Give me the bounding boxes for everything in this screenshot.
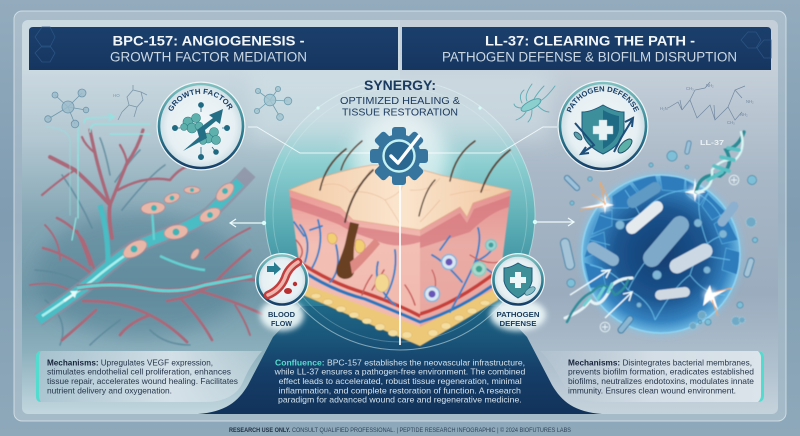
vessel band right: [420, 270, 499, 314]
molecule: peptide structure: [660, 82, 754, 125]
bacteria shapes: [573, 131, 634, 155]
loose rods outside: [565, 143, 751, 330]
cell nuclei: [130, 188, 228, 252]
accent bar: [36, 351, 41, 402]
spark top: [684, 178, 706, 202]
shield shade: [603, 110, 619, 149]
rod: [722, 206, 734, 222]
badge ring: [558, 80, 648, 172]
label: blood flow: [268, 310, 296, 328]
light beam: [399, 165, 401, 345]
hair follicle: [336, 222, 359, 279]
line: DEFENSE: [500, 319, 536, 328]
subtitle line two: TISSUE RESTORATION: [342, 108, 458, 118]
sparks: [580, 178, 732, 316]
line: FLOW: [271, 319, 293, 328]
callout: confluence text: [274, 358, 526, 405]
badge ring: [494, 256, 542, 304]
line: Confluence: BPC-157 establishes the neovascular infrastructure,: [275, 358, 525, 367]
check mark: [391, 136, 419, 163]
badge curved label: GROWTH FACTOR: [168, 88, 232, 111]
shield: [504, 263, 532, 298]
rod: [660, 292, 685, 295]
molecule: top left: [45, 89, 89, 128]
central healing halo: [265, 132, 535, 307]
green cell: [472, 262, 486, 276]
rod: [632, 207, 657, 228]
vessel: [268, 262, 298, 295]
hexagon decoration: [741, 32, 771, 58]
label glow right: [490, 299, 546, 331]
title line one: LL-37: CLEARING THE PATH -: [485, 32, 695, 48]
label glow left: [260, 299, 304, 331]
dark tissue shade: [35, 213, 245, 337]
methyl label two: CH₃: [727, 120, 735, 125]
purple cell: [442, 254, 456, 270]
red capillary network: [30, 130, 262, 342]
fat layer: [302, 280, 499, 346]
fat cluster: [375, 274, 389, 292]
line: inflammation, and complete restoration of function. A research: [279, 386, 521, 395]
bacterium: [523, 285, 537, 297]
halo arcs: [265, 80, 535, 350]
skin top surface: [289, 165, 511, 230]
right arrow: [535, 218, 574, 226]
icon: synergy gear: [370, 127, 428, 185]
protein cluster: [180, 114, 220, 144]
central glow: [352, 112, 448, 208]
icon: small pathogen defense badge: [491, 253, 545, 307]
cell nuclei: [428, 243, 493, 298]
line: prevents biofilm formation, eradicates established: [568, 368, 754, 377]
line: immunity. Ensures clean wound environment.: [568, 386, 736, 395]
label: LL-37: LL-37: [700, 138, 724, 147]
badge disc: [491, 253, 545, 307]
panel: right background: [400, 20, 778, 414]
icon: growth factor badge: [156, 82, 246, 170]
spark left: [580, 194, 614, 214]
epidermis wave: [290, 196, 510, 248]
DNA helix: bottom: [565, 278, 632, 322]
erector muscle: [350, 238, 380, 274]
amine label two: NH₂: [706, 83, 714, 88]
blood cells: [284, 282, 297, 294]
inner arc: [272, 126, 528, 342]
peptide labels: [660, 83, 754, 125]
panel: right header: [402, 27, 771, 70]
line: while LL-37 ensures a pathogen-free environment. The combined: [274, 368, 526, 377]
synergy heading: [340, 78, 460, 118]
right connector: [428, 127, 557, 153]
small spheres: [616, 219, 727, 308]
icon: pathogen defense badge: [558, 80, 648, 172]
line: nutrient delivery and oxygenation.: [47, 386, 172, 395]
title line two: PATHOGEN DEFENSE & BIOFILM DISRUPTION: [442, 48, 737, 64]
dermis left face: [289, 190, 420, 327]
faint background capillaries: [35, 138, 190, 345]
bacterium small: [573, 131, 583, 141]
left arrow: [230, 219, 263, 227]
icon: blood flow badge: [255, 253, 309, 307]
line: Mechanisms: Disintegrates bacterial membranes,: [568, 358, 752, 367]
sparkle nodes: [262, 106, 537, 225]
attack arrows: [570, 270, 632, 318]
accent bar: [758, 351, 764, 402]
vessel flow arrow: [63, 291, 77, 302]
title line two: GROWTH FACTOR MEDIATION: [110, 48, 307, 64]
immune cells: [424, 240, 496, 302]
line: tissue repair, accelerates wound healing. Facilitates: [47, 377, 238, 386]
fat layer lobules: [311, 293, 490, 338]
rod: [677, 251, 705, 266]
amine label three: NH₂: [746, 99, 754, 104]
sebaceous gland: [328, 233, 365, 253]
gear inner ring: [384, 140, 414, 172]
endothelial cells: [120, 180, 237, 262]
callout text: [47, 358, 238, 395]
teal signal pathways with arrows: [46, 114, 150, 240]
outer arc: [265, 80, 535, 350]
bacterium: [616, 137, 634, 155]
molecule: chemical ring: [113, 85, 147, 120]
subtitle line one: OPTIMIZED HEALING &: [340, 96, 460, 107]
vessel band left: [296, 260, 420, 316]
methyl label: CH₃: [686, 86, 694, 91]
DNA helix: top: [696, 132, 744, 192]
spiky pathogens: [690, 217, 756, 330]
debris dots: [567, 151, 758, 325]
panel: left background: [22, 20, 400, 414]
connector lines to synergy gear: [248, 127, 557, 153]
badge colored ring: [159, 84, 243, 168]
line: paradigm for advanced wound care and regenerative medicine.: [278, 396, 522, 405]
rod: [652, 225, 680, 258]
badge ring: [156, 82, 246, 170]
lower purple cell: [424, 286, 440, 302]
label: pathogen defense: [496, 310, 540, 328]
spark orange lower: [712, 288, 732, 316]
surface cracks: [320, 170, 490, 224]
plus markers: [600, 175, 739, 332]
line: biofilms, neutralizes endotoxins, modulates innate: [568, 377, 754, 386]
badge colored ring: [560, 83, 646, 169]
dermis right face: [420, 190, 511, 327]
header bar: [29, 27, 398, 70]
line: BLOOD: [268, 310, 296, 319]
cell glow: [579, 172, 743, 336]
line: Mechanisms: Upregulates VEGF expression,: [47, 358, 213, 367]
biofilm cracks: [590, 190, 730, 320]
molecule: bacterium top right: [514, 84, 555, 122]
spark left glow: [599, 199, 611, 211]
cross: [510, 272, 526, 288]
callout: left mechanisms: [36, 351, 262, 402]
shield: [582, 105, 624, 154]
sphere rim: [582, 175, 740, 333]
title line one: BPC-157: ANGIOGENESIS -: [112, 32, 305, 48]
hydroxyl label: HO: [113, 93, 120, 98]
title: SYNERGY:: [364, 78, 436, 93]
blood vessels: [294, 220, 500, 322]
panel: left header: [29, 27, 398, 70]
horizontal flow arrows: [230, 218, 574, 227]
spark lower right: [703, 285, 728, 310]
badge curved label: PATHOGEN DEFENSE: [566, 86, 640, 112]
gear body with teeth: [370, 127, 428, 185]
biofilm rim plates: [584, 174, 740, 288]
skin tissue block: [289, 141, 511, 346]
teal main vessel: [38, 172, 252, 320]
teal cell: [486, 240, 496, 250]
line: stimulates endothelial cell proliferation, enhances: [47, 368, 231, 377]
left connector: [248, 127, 376, 153]
callout box: [540, 351, 764, 402]
rod: [633, 188, 655, 202]
panel: dark confluence background: [198, 306, 602, 414]
centre top light backdrop: [250, 70, 550, 140]
header bar: [402, 27, 771, 70]
callout text: [568, 358, 754, 395]
growth arrow: [183, 109, 223, 151]
callout: right mechanisms: [540, 351, 764, 402]
amine label four: NH₂: [740, 112, 748, 117]
vessel core: [268, 262, 298, 295]
flow arrow: [267, 262, 281, 275]
molecule: top centre left: [254, 86, 292, 120]
spark lower right glow: [704, 289, 716, 301]
callout box: [36, 351, 262, 402]
medical cross: [593, 120, 613, 140]
panel: left illustration angiogenesis: [30, 114, 262, 345]
line: effect leads to accelerated, robust tissue regeneration, minimal: [279, 377, 522, 386]
biofilm sphere: [582, 175, 740, 333]
badge disc: [255, 253, 309, 307]
footer disclaimer: RESEARCH USE ONLY. CONSULT QUALIFIED PROFESSIONAL. | PEPTIDE RESEARCH INFOGRAPHIC | © 2024 BIOFUTURES LABS: [229, 426, 571, 434]
deflection arrows: [575, 118, 633, 154]
panel: right illustration biofilm: [565, 132, 758, 336]
rod: [593, 248, 613, 260]
bacteria rods inside: [593, 188, 734, 295]
badge ring: [258, 256, 306, 304]
hairs: [320, 141, 510, 222]
amine label: H₂N: [660, 106, 668, 111]
spark glow: [689, 186, 701, 198]
hexagon decoration: [35, 27, 55, 62]
spark orange: [580, 182, 609, 210]
receptor nodes: [172, 102, 230, 160]
cell bodies: [120, 180, 237, 262]
line: PATHOGEN: [496, 310, 540, 319]
